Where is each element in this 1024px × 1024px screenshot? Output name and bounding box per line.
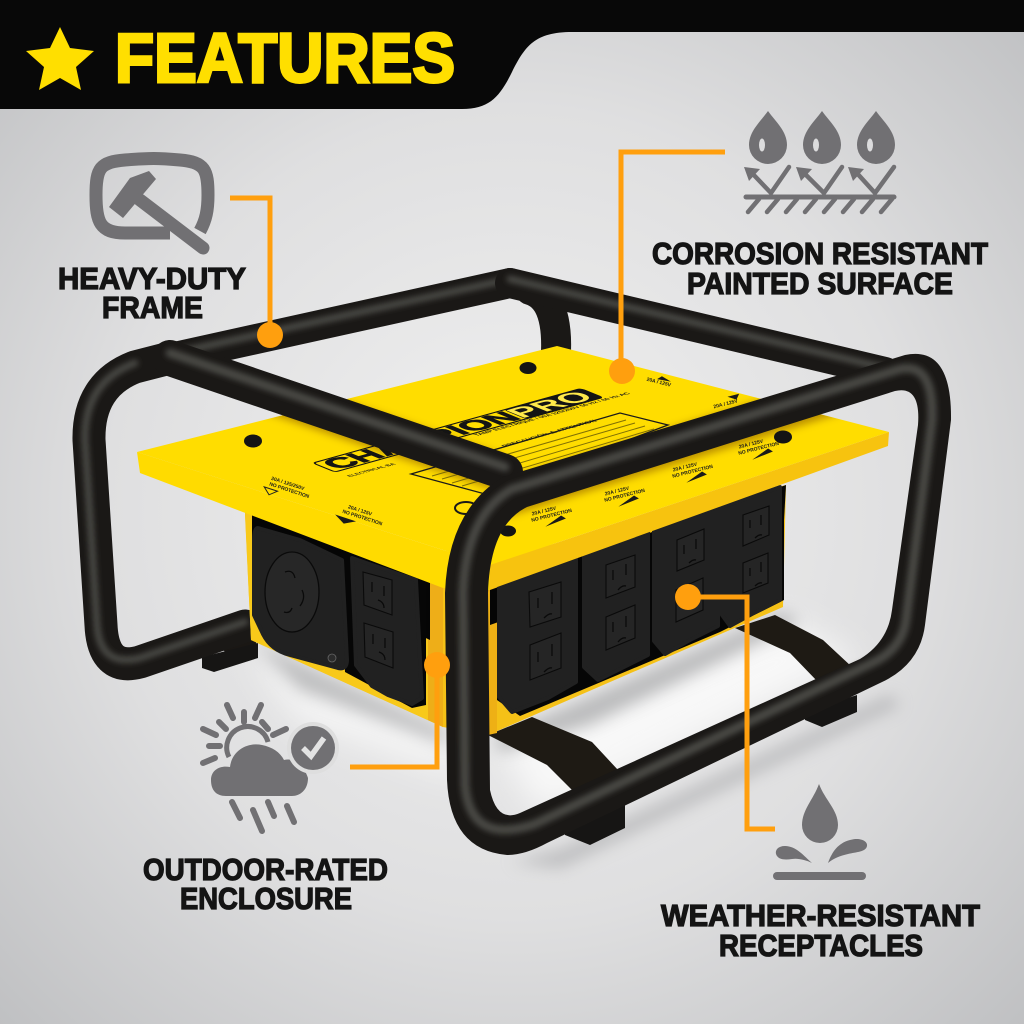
label: corrosion resistant painted surface: PAINTED SURFACE <box>687 266 953 301</box>
bolts <box>244 362 792 536</box>
label: corrosion resistant painted surface <box>652 236 988 301</box>
icon: hammer in frame <box>96 158 208 248</box>
floor shadows <box>250 612 900 868</box>
icon: water drops repelled from surface <box>744 111 895 212</box>
receptacle rating labels <box>262 373 781 535</box>
label: weather-resistant receptacles: WEATHER-RESISTANT <box>661 898 980 933</box>
right outlet 3 <box>654 507 718 654</box>
receptacle rating labels: 20A / 125V <box>604 485 630 497</box>
label: heavy-duty frame <box>58 261 246 325</box>
enclosure body <box>245 485 786 735</box>
right outlet 2 <box>584 532 648 680</box>
yellow top plate: ELECTRICAL BA <box>346 463 399 478</box>
receptacle rating labels: NO PROTECTION <box>531 508 573 524</box>
front tube loop <box>445 354 951 855</box>
receptacle rating labels: 20A / 125V <box>347 504 373 518</box>
left outlet: duplex cover <box>352 558 422 704</box>
receptacle rating labels: NO PROTECTION <box>341 509 383 527</box>
rear post <box>530 290 556 352</box>
label: outdoor-rated enclosure <box>143 852 388 916</box>
rear left tube bottom <box>89 358 245 664</box>
yellow top plate <box>137 346 900 590</box>
receptacle rating labels: 20A / 125V <box>672 461 698 473</box>
callout leader: heavy-duty frame <box>230 198 283 348</box>
callout leader: corrosion resistant surface <box>609 152 725 384</box>
receptacle rating labels: NO PROTECTION <box>672 464 714 480</box>
tube shadows on plate <box>270 398 838 520</box>
label: heavy-duty frame: HEAVY-DUTY <box>58 261 246 296</box>
plate model text: TAMP ELECTRIQUE / 50A 125/250V 50 Hz / 60 Hz AC <box>472 392 633 437</box>
label: heavy-duty frame: FRAME <box>102 290 203 325</box>
header banner <box>0 0 1024 109</box>
title: FEATURES <box>115 19 455 97</box>
label: corrosion resistant painted surface: CORROSION RESISTANT <box>652 236 988 271</box>
receptacle rating labels: 20A / 125V <box>531 505 557 517</box>
product: power distribution box in tubular frame <box>85 279 951 855</box>
warning label <box>411 413 668 494</box>
icon: sun, cloud, rain and check <box>203 705 339 831</box>
brand logo: CHAMPION PRO <box>314 388 602 472</box>
callout leader: weather-resistant receptacles <box>675 584 775 829</box>
label: outdoor-rated enclosure: ENCLOSURE <box>180 881 352 916</box>
warning label: PRECAUCIÓN ⚠ ATTENTION <box>499 419 599 448</box>
receptacle rating labels: NO PROTECTION <box>268 481 310 500</box>
icon: water drop splash <box>773 784 867 880</box>
callout leader: outdoor-rated enclosure <box>350 652 450 767</box>
receptacle rating labels: 20A / 125V <box>713 398 739 410</box>
label: weather-resistant receptacles <box>661 898 980 963</box>
right outlet 4 <box>722 487 780 626</box>
label: weather-resistant receptacles: RECEPTACLES <box>719 928 923 963</box>
left outlet: twist-lock <box>254 528 347 668</box>
receptacle rating labels: NO PROTECTION <box>604 488 646 504</box>
star icon <box>26 27 94 90</box>
label: outdoor-rated enclosure: OUTDOOR-RATED <box>143 852 388 887</box>
rubber feet and straps <box>202 610 857 845</box>
receptacle rating labels: NO PROTECTION <box>738 441 780 457</box>
receptacle rating labels: 20A / 125V <box>646 377 672 389</box>
top rear tubes <box>170 279 885 472</box>
right outlet 1 <box>499 557 576 712</box>
receptacle rating labels: 30A / 125/250V <box>270 476 306 492</box>
receptacle rating labels: 20A / 125V <box>738 438 764 450</box>
